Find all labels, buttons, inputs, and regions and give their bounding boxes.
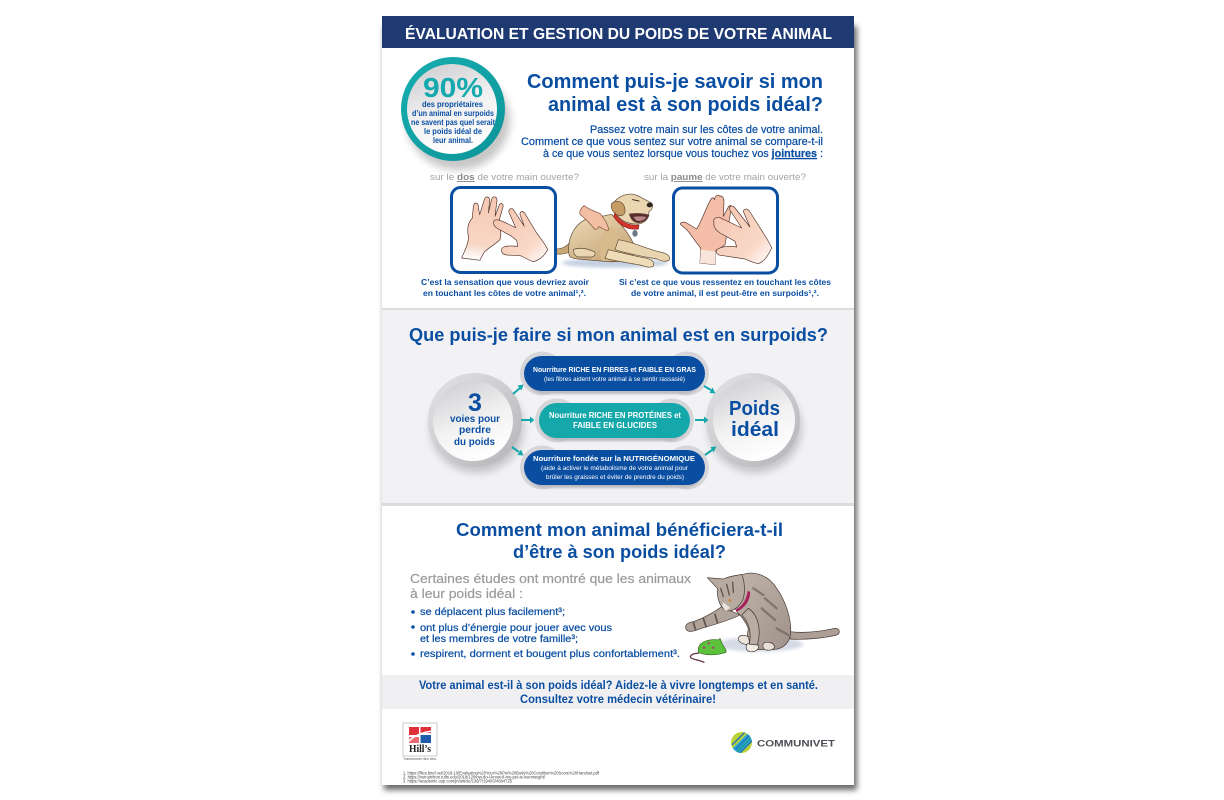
intro: studies	[410, 571, 692, 601]
intro text: Passez votre main sur les côtes de votre animal.	[590, 124, 823, 136]
caption: back of hand: en touchant les côtes de votre animal¹,².	[423, 288, 586, 298]
icon: hands palm comparison	[674, 188, 778, 273]
callout: 90 percent badge: des propriétaires	[422, 99, 483, 109]
node: ideal weight: Poids	[729, 397, 780, 420]
references: 1. https://files.brief.vet/2018-10/Evaluating%20Your%20Pet%20Body%20Condition%20Score%20Handout.pdf	[403, 770, 600, 776]
call to action band	[382, 675, 854, 709]
intro text: à ce que vous sentez lorsque vous touchez vos jointures :	[543, 148, 823, 160]
logo: CommuniVet: COMMUNIVET	[757, 738, 836, 748]
pill: protein	[535, 398, 694, 442]
logo: Hill's: Transformer des vies.	[403, 757, 437, 761]
panel: how to know	[401, 57, 831, 298]
intro text: Comment ce que vous sentez sur votre animal se compare-t-il	[521, 136, 823, 148]
title banner	[382, 16, 854, 48]
logo: CommuniVet	[731, 732, 835, 753]
page shadow	[384, 26, 857, 790]
logo: Hill's	[403, 723, 437, 761]
heading: benefits: Comment mon animal bénéficiera-t-il	[456, 519, 783, 540]
pill: nutrigenomics: Nourriture fondée sur la NUTRIGÉNOMIQUE	[533, 454, 695, 463]
callout: 90 percent badge: leur animal.	[433, 135, 473, 145]
list: benefits: ont plus d’énergie pour jouer avec vous	[420, 623, 612, 634]
caption: back of hand	[421, 277, 590, 298]
list: benefits	[411, 607, 680, 660]
panel: benefits	[382, 519, 854, 709]
heading: benefits	[456, 519, 783, 562]
callout: 90 percent badge: d’un animal en surpoids	[412, 108, 494, 118]
references: 2. https://vetnutrition.tufts.edu/2018/12/how-do-i-know-if-my-pet-is-overweight/	[403, 774, 546, 780]
heading: how to know: Comment puis-je savoir si mon	[527, 71, 823, 93]
node: three ways: 3	[468, 389, 482, 417]
list: benefits: respirent, dorment et bougent plus confortablement³.	[420, 649, 680, 660]
pill: protein: FAIBLE EN GLUCIDES	[573, 421, 658, 430]
question: palm of hand: sur la paume de votre main ouverte?	[644, 172, 806, 183]
pill: fibre: (les fibres aident votre animal à se sentir rassasié)	[544, 377, 685, 383]
node: three ways	[428, 373, 524, 473]
pill: nutrigenomics	[520, 446, 709, 490]
caption: palm of hand	[619, 277, 831, 298]
intro: studies: Certaines études ont montré que les animaux	[410, 571, 692, 586]
callout: 90 percent badge: 90%	[423, 72, 483, 103]
question: back of hand: sur le dos de votre main ouverte?	[430, 172, 579, 183]
pill: nutrigenomics: (aide à activer le métabolisme de votre animal pour	[541, 466, 688, 472]
references	[403, 770, 600, 784]
caption: palm of hand: Si c’est ce que vous ressentez en touchant les côtes	[619, 277, 831, 287]
pill: fibre: Nourriture RICHE EN FIBRES et FAIBLE EN GRAS	[533, 365, 696, 374]
panel: what to do	[382, 308, 854, 506]
title banner: ÉVALUATION ET GESTION DU POIDS DE VOTRE ANIMAL	[405, 24, 832, 43]
heading: how to know: animal est à son poids idéal?	[548, 94, 823, 116]
callout: 90 percent badge: ne savent pas quel serait	[411, 117, 495, 127]
list: benefits: et les membres de votre famille³;	[420, 634, 578, 645]
caption: back of hand: C’est la sensation que vous devriez avoir	[421, 277, 590, 287]
references: 3. https://academic.oup.com/jn/article/136/7/1940S/4664725	[403, 778, 513, 784]
heading: what to do: Que puis-je faire si mon animal est en surpoids?	[409, 324, 828, 345]
icon: hands back-of-hand comparison	[452, 188, 556, 272]
node: three ways: voies pour	[450, 413, 500, 425]
caption: palm of hand: de votre animal, il est peut-être en surpoids¹,².	[631, 288, 819, 298]
arrows: flow	[512, 384, 716, 456]
page background	[382, 16, 854, 785]
call to action band: Consultez votre médecin vétérinaire!	[520, 694, 716, 706]
node: ideal weight	[706, 373, 802, 473]
pill: protein: Nourriture RICHE EN PROTÉINES et	[549, 411, 681, 420]
callout: 90 percent badge	[401, 57, 510, 170]
node: three ways: du poids	[454, 436, 495, 448]
node: ideal weight: idéal	[731, 418, 779, 441]
list: benefits: se déplacent plus facilement³;	[420, 607, 565, 618]
heading: benefits: d’être à son poids idéal?	[513, 541, 726, 562]
call to action band: Votre animal est-il à son poids idéal? Aidez-le à vivre longtemps et en santé.	[419, 680, 818, 692]
icon: dog being petted	[557, 194, 670, 268]
pill: nutrigenomics: brûler les graisses et éviter de prendre du poids)	[546, 475, 684, 481]
icon: cat playing with toy mouse	[686, 573, 839, 662]
node: three ways: perdre	[459, 424, 491, 436]
pill: fibre	[520, 352, 709, 396]
heading: how to know	[527, 71, 823, 116]
logo: Hill's: Hill’s	[409, 744, 431, 755]
callout: 90 percent badge: le poids idéal de	[424, 126, 482, 136]
intro: studies: à leur poids idéal :	[410, 586, 523, 601]
intro text	[521, 124, 823, 160]
